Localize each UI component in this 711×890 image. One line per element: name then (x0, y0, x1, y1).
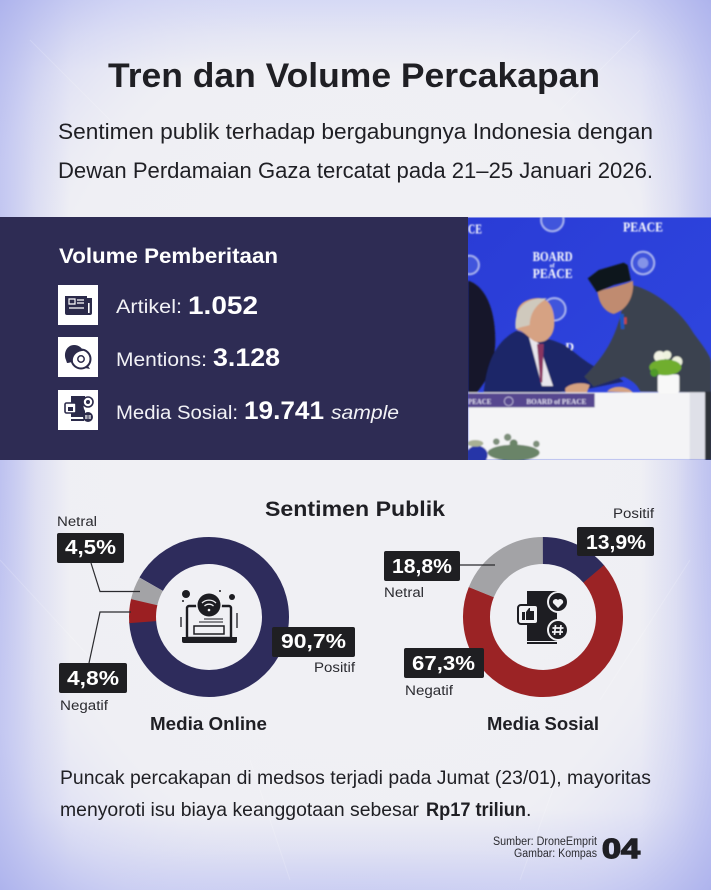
closing text: menyoroti isu biaya keanggotaan sebesar (60, 799, 419, 821)
intro text: Sentimen publik terhadap bergabungnya Indonesia dengan (58, 119, 653, 144)
chart: media online donut (57, 514, 355, 734)
backdrop seals and lettering: of (550, 263, 556, 269)
row: media sosial (116, 397, 399, 425)
closing text: Rp17 triliun (426, 799, 526, 821)
seated man (484, 298, 624, 393)
row: artikel (116, 292, 258, 320)
label: netral: 18,8% (392, 555, 452, 578)
label: negatif (404, 648, 484, 698)
backdrop seals and lettering: PEACE (623, 220, 663, 235)
backdrop seals and lettering (468, 217, 664, 352)
row: artikel: Artikel: (116, 297, 182, 318)
name placard: BOARD of PEACE (526, 397, 586, 406)
icon: phone with social bubbles (518, 591, 569, 644)
chart: media sosial donut (384, 506, 654, 734)
intro text: Dewan Perdamaian Gaza tercatat pada 21–25 Januari 2026. (58, 158, 653, 183)
row: media sosial: 19.741 (244, 397, 324, 425)
intro text (58, 119, 653, 183)
donut ring (449, 523, 637, 711)
label: positif (577, 506, 654, 556)
label: negatif: Negatif (60, 698, 108, 713)
closing text: Puncak percakapan di medsos terjadi pada Jumat (23/01), mayoritas (60, 767, 651, 789)
donut ring (118, 526, 300, 708)
backdrop seals and lettering: PEACE (533, 267, 573, 282)
plant (468, 432, 540, 460)
label: netral (57, 514, 124, 563)
source credits: Sumber: DroneEmprit (493, 836, 598, 848)
label: netral: Netral (384, 585, 424, 600)
icon: newspaper (58, 285, 98, 325)
connector lines (89, 563, 140, 663)
page number: 04 (602, 833, 641, 864)
connector line (460, 564, 495, 566)
standing man (565, 263, 711, 393)
panel heading: Volume Pemberitaan (59, 244, 278, 268)
backdrop seals and lettering: BOARD (533, 250, 573, 265)
row: mentions (116, 344, 280, 372)
name placard: PEACE (468, 397, 491, 406)
label: positif: 90,7% (281, 630, 346, 653)
label: negatif: 4,8% (67, 667, 119, 690)
closing text (60, 767, 651, 821)
label: positif: Positif (613, 506, 654, 521)
backdrop seals and lettering: D (565, 339, 574, 353)
label: negatif (59, 663, 127, 713)
name placard (468, 393, 595, 407)
icon: laptop with wifi (181, 590, 237, 643)
label: negatif: Negatif (405, 683, 453, 698)
label: positif: Positif (314, 660, 355, 675)
flowers (649, 351, 682, 393)
icon: mentions (58, 337, 98, 377)
row: mentions: 3.128 (213, 344, 280, 372)
table (468, 392, 707, 460)
panel: volume pemberitaan (0, 217, 468, 460)
label: netral: 4,5% (65, 536, 116, 559)
label: netral: Netral (57, 514, 97, 529)
chart title: Media Online (150, 714, 267, 734)
source credits (493, 836, 598, 860)
row: media sosial: Media Sosial: (116, 403, 238, 424)
closing text: . (526, 799, 531, 821)
chart title: Media Sosial (487, 714, 599, 734)
label: positif: 13,9% (586, 531, 646, 554)
row: media sosial: sample (331, 403, 399, 424)
photo: board of peace handshake (460, 209, 711, 464)
icon: social media small (58, 390, 98, 430)
label: netral (384, 551, 460, 600)
backdrop seals and lettering: CE (468, 221, 482, 236)
source credits: Gambar: Kompas (514, 848, 597, 860)
label: negatif: 67,3% (412, 652, 475, 675)
row: artikel: 1.052 (188, 292, 258, 320)
man left edge (468, 281, 495, 393)
row: mentions: Mentions: (116, 350, 207, 371)
label: positif (272, 627, 355, 675)
section heading: sentimen publik: Sentimen Publik (265, 498, 445, 521)
title: Tren dan Volume Percakapan (108, 57, 600, 95)
